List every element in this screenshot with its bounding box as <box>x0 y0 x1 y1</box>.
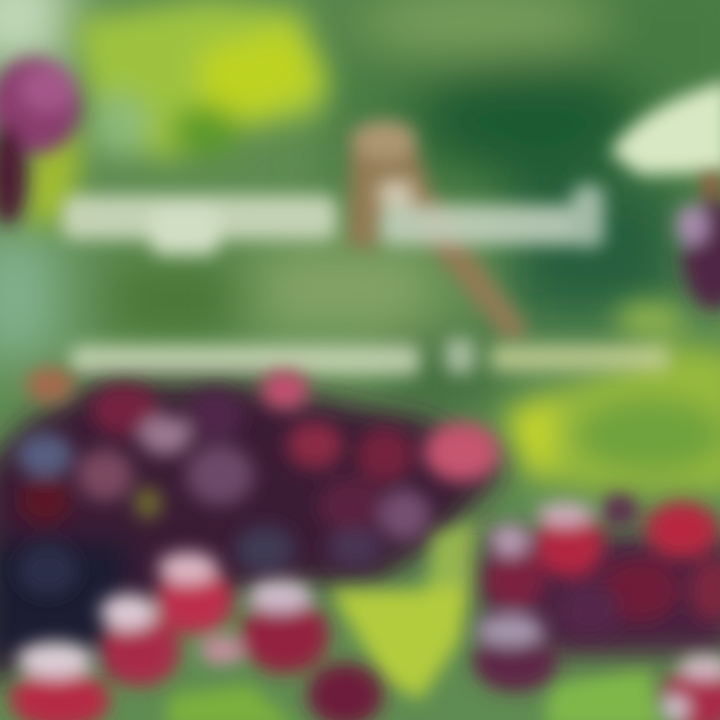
grapes: lower right bunch <box>473 494 720 720</box>
branch <box>348 120 530 345</box>
grapes: top left cluster <box>0 57 80 225</box>
grapes: lower left bunch <box>10 552 383 720</box>
leaf: lower centre lime <box>165 520 660 720</box>
grapes: right edge <box>676 173 720 310</box>
subtitle placeholder, illegible in reference <box>70 338 670 375</box>
leaf: upper yellow-green <box>25 0 330 225</box>
leaf: right lime <box>500 302 720 495</box>
title placeholder, illegible in reference <box>62 180 604 255</box>
leaf: pale upper right <box>610 80 720 175</box>
grapes: main cluster <box>0 367 505 680</box>
